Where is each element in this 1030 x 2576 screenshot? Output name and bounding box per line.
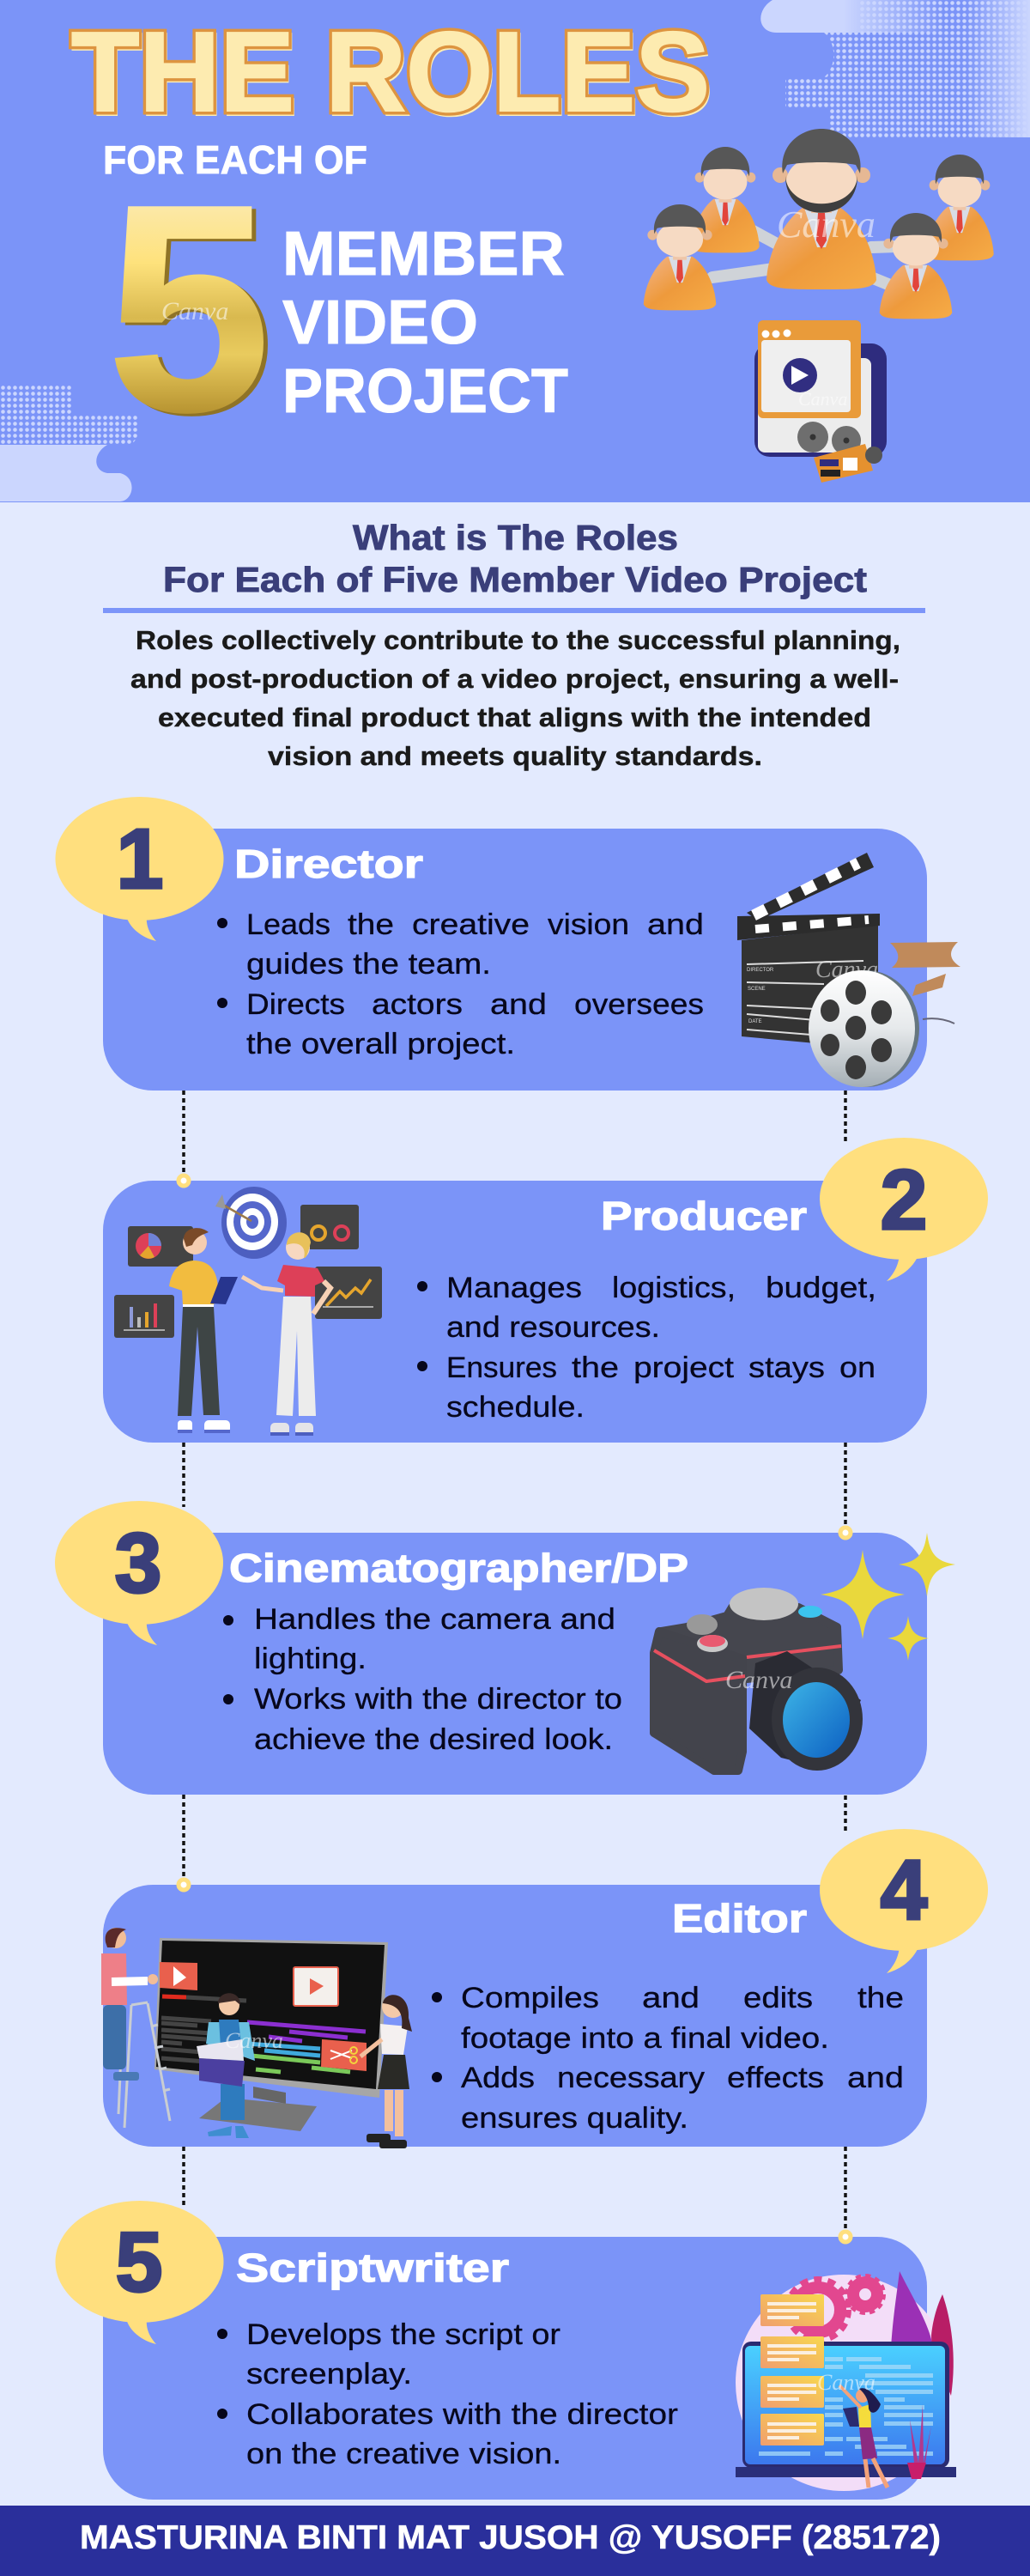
footer bbox=[0, 2506, 1030, 2576]
subtitle: for each of: FOR EACH OF bbox=[103, 137, 367, 182]
connector end dots bbox=[179, 1176, 851, 2242]
illustration: editing team at monitor: Canva bbox=[225, 2028, 283, 2053]
heading: producer: Producer bbox=[601, 1194, 807, 1238]
icon: video player and projector: Canva bbox=[798, 388, 847, 410]
icon: clapperboard and film reel bbox=[737, 853, 960, 1087]
badge: number 2: 2 bbox=[881, 1152, 927, 1247]
heading: editor: Editor bbox=[672, 1896, 807, 1941]
icon: camera: Canva bbox=[725, 1666, 792, 1694]
panel: cinematographer bbox=[55, 1501, 955, 1795]
icon: clapperboard and film reel: Canva bbox=[815, 957, 878, 983]
bullet list: producer: stays bbox=[748, 1352, 825, 1384]
bullet list: director: oversees bbox=[574, 988, 704, 1021]
bullet list: director: Directs bbox=[246, 988, 345, 1021]
heading: member video project: MEMBER bbox=[282, 220, 565, 289]
dotted connectors between cards bbox=[184, 1091, 845, 2237]
bullet list: editor: Adds bbox=[461, 2062, 535, 2094]
bullet list: producer: the bbox=[572, 1352, 619, 1384]
bullet list: editor bbox=[432, 1982, 904, 2135]
badge: number 1: 1 bbox=[117, 811, 163, 906]
bullet list: director: the overall project. bbox=[246, 1028, 515, 1060]
bullet list: director: actors bbox=[372, 988, 463, 1021]
panel: editor bbox=[101, 1829, 988, 2148]
illustration: laptop with notes and woman bbox=[736, 2271, 956, 2491]
big gold number 5: Canva bbox=[161, 297, 228, 325]
bullet list: cinematographer: lighting. bbox=[254, 1643, 367, 1675]
title: THE ROLES: THE ROLES bbox=[71, 9, 710, 135]
bullet list: scriptwriter bbox=[217, 2318, 678, 2470]
bullet list: producer: and resources. bbox=[446, 1311, 660, 1344]
panel: producer bbox=[103, 1138, 988, 1443]
badge: number 2 bbox=[820, 1138, 988, 1281]
heading: member video project: PROJECT bbox=[282, 357, 568, 426]
icon: team of five people bbox=[644, 129, 994, 319]
bullet list: producer: logistics, bbox=[612, 1272, 736, 1304]
bullet list: producer: project bbox=[633, 1352, 735, 1384]
icon: clapperboard and film reel: DATE bbox=[748, 1019, 762, 1024]
illustration: laptop with notes and woman: Canva bbox=[817, 2370, 876, 2395]
panel: director bbox=[55, 797, 960, 1091]
section heading: What is The Roles bbox=[353, 518, 678, 557]
illustration: two people with charts and target bbox=[114, 1187, 382, 1436]
panel: scriptwriter bbox=[55, 2201, 956, 2500]
section heading bbox=[163, 518, 867, 599]
title: THE ROLES: THE ROLES bbox=[73, 11, 712, 137]
bullet list: director: Leads bbox=[246, 908, 330, 941]
intro paragraph: executed final product that aligns with the intended bbox=[158, 702, 871, 732]
icon: clapperboard and film reel: DIRECTOR bbox=[747, 968, 774, 973]
bullet list: editor: and bbox=[847, 2062, 904, 2094]
badge: number 4: 4 bbox=[881, 1843, 927, 1937]
bullet list: scriptwriter: Develops the script or bbox=[246, 2318, 560, 2351]
bullet list: editor: necessary bbox=[557, 2062, 705, 2094]
bullet list: director: vision bbox=[548, 908, 629, 941]
badge: number 1 bbox=[55, 797, 223, 941]
heading: scriptwriter: Scriptwriter bbox=[236, 2245, 509, 2290]
intro paragraph: and post-production of a video project, ensuring a well- bbox=[130, 664, 899, 694]
bullet list: director: creative bbox=[412, 908, 530, 941]
bullet list: editor: edits bbox=[743, 1982, 813, 2014]
bullet list: cinematographer: Works with the director to bbox=[254, 1683, 622, 1716]
badge: number 3: 3 bbox=[115, 1516, 161, 1610]
icon: team of five people: Canva bbox=[777, 204, 876, 246]
intro paragraph: vision and meets quality standards. bbox=[268, 741, 762, 771]
decoration: top right cloud bbox=[760, 0, 1030, 137]
big gold number 5: 5 bbox=[107, 144, 270, 472]
title: THE ROLES: THE ROLES bbox=[71, 9, 710, 135]
decoration: bottom left cloud bbox=[0, 385, 139, 501]
bullet list: director bbox=[217, 908, 704, 1060]
bullet list: editor: footage into a final video. bbox=[461, 2022, 829, 2055]
bullet list: producer: Manages bbox=[446, 1272, 582, 1304]
bullet list: scriptwriter: screenplay. bbox=[246, 2358, 412, 2391]
bullet list: director: the bbox=[348, 908, 394, 941]
bullet list: producer: on bbox=[839, 1352, 876, 1384]
badge: number 5: 5 bbox=[116, 2215, 162, 2309]
badge: number 4 bbox=[820, 1829, 988, 1973]
big gold number 5: 5 bbox=[112, 147, 275, 475]
illustration: editing team at monitor bbox=[101, 1928, 412, 2148]
header panel bbox=[0, 0, 1030, 502]
bullet list: editor: Compiles bbox=[461, 1982, 599, 2014]
bullet list: director: and bbox=[647, 908, 704, 941]
bullet list: producer bbox=[417, 1272, 876, 1424]
bullet list: director: and bbox=[490, 988, 547, 1021]
intro paragraph bbox=[130, 625, 900, 771]
heading: director: Director bbox=[234, 841, 423, 886]
heading: member video project: VIDEO bbox=[282, 289, 478, 357]
bullet list: cinematographer: achieve the desired look. bbox=[254, 1723, 613, 1756]
bullet list: editor: the bbox=[857, 1982, 904, 2014]
badge: number 3 bbox=[55, 1501, 223, 1645]
bullet list: producer: budget, bbox=[766, 1272, 876, 1304]
icon: sparkles bbox=[821, 1533, 955, 1661]
bullet list: cinematographer bbox=[223, 1603, 622, 1756]
bullet list: producer: Ensures bbox=[446, 1352, 557, 1384]
bullet list: scriptwriter: on the creative vision. bbox=[246, 2438, 561, 2470]
bullet list: cinematographer: Handles the camera and bbox=[254, 1603, 615, 1636]
heading: cinematographer: Cinematographer/DP bbox=[229, 1546, 688, 1590]
bullet list: scriptwriter: Collaborates with the director bbox=[246, 2398, 678, 2431]
badge: number 5 bbox=[55, 2201, 223, 2344]
bullet list: director: guides the team. bbox=[246, 948, 491, 981]
icon: clapperboard and film reel: SCENE bbox=[748, 987, 766, 992]
icon: video player and projector bbox=[754, 320, 887, 483]
bullet list: editor: effects bbox=[727, 2062, 824, 2094]
bullet list: editor: ensures quality. bbox=[461, 2102, 688, 2135]
bullet list: producer: schedule. bbox=[446, 1391, 585, 1424]
section heading: For Each of Five Member Video Project bbox=[163, 560, 867, 599]
intro paragraph: Roles collectively contribute to the successful planning, bbox=[136, 625, 900, 655]
footer: MASTURINA BINTI MAT JUSOH @ YUSOFF (285172) bbox=[80, 2519, 941, 2556]
bullet list: editor: and bbox=[642, 1982, 700, 2014]
heading: member video project bbox=[282, 220, 568, 426]
icon: camera bbox=[654, 1588, 863, 1771]
